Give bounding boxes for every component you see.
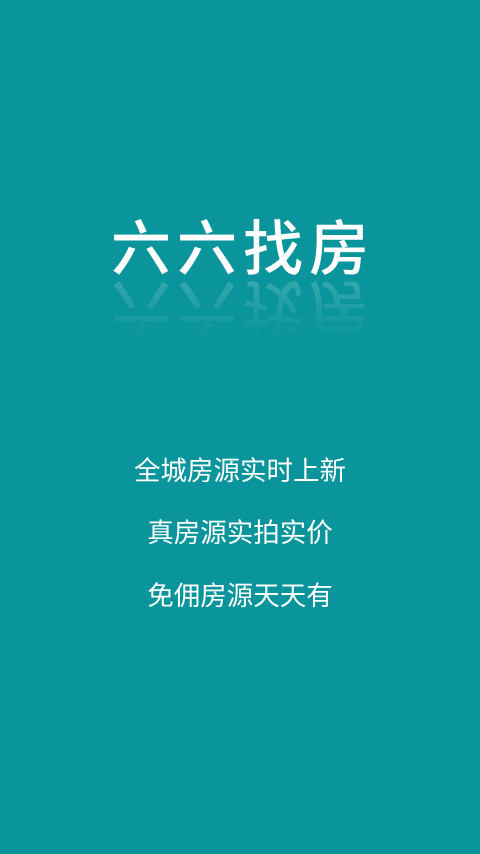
title: 六六找房 xyxy=(111,216,375,283)
title reflection: 六六找房 xyxy=(111,273,375,340)
slogan line 2: 真房源实拍实价 xyxy=(147,518,333,548)
slogan line 1: 全城房源实时上新 xyxy=(134,456,346,486)
slogan line 3: 免佣房源天天有 xyxy=(147,581,333,611)
